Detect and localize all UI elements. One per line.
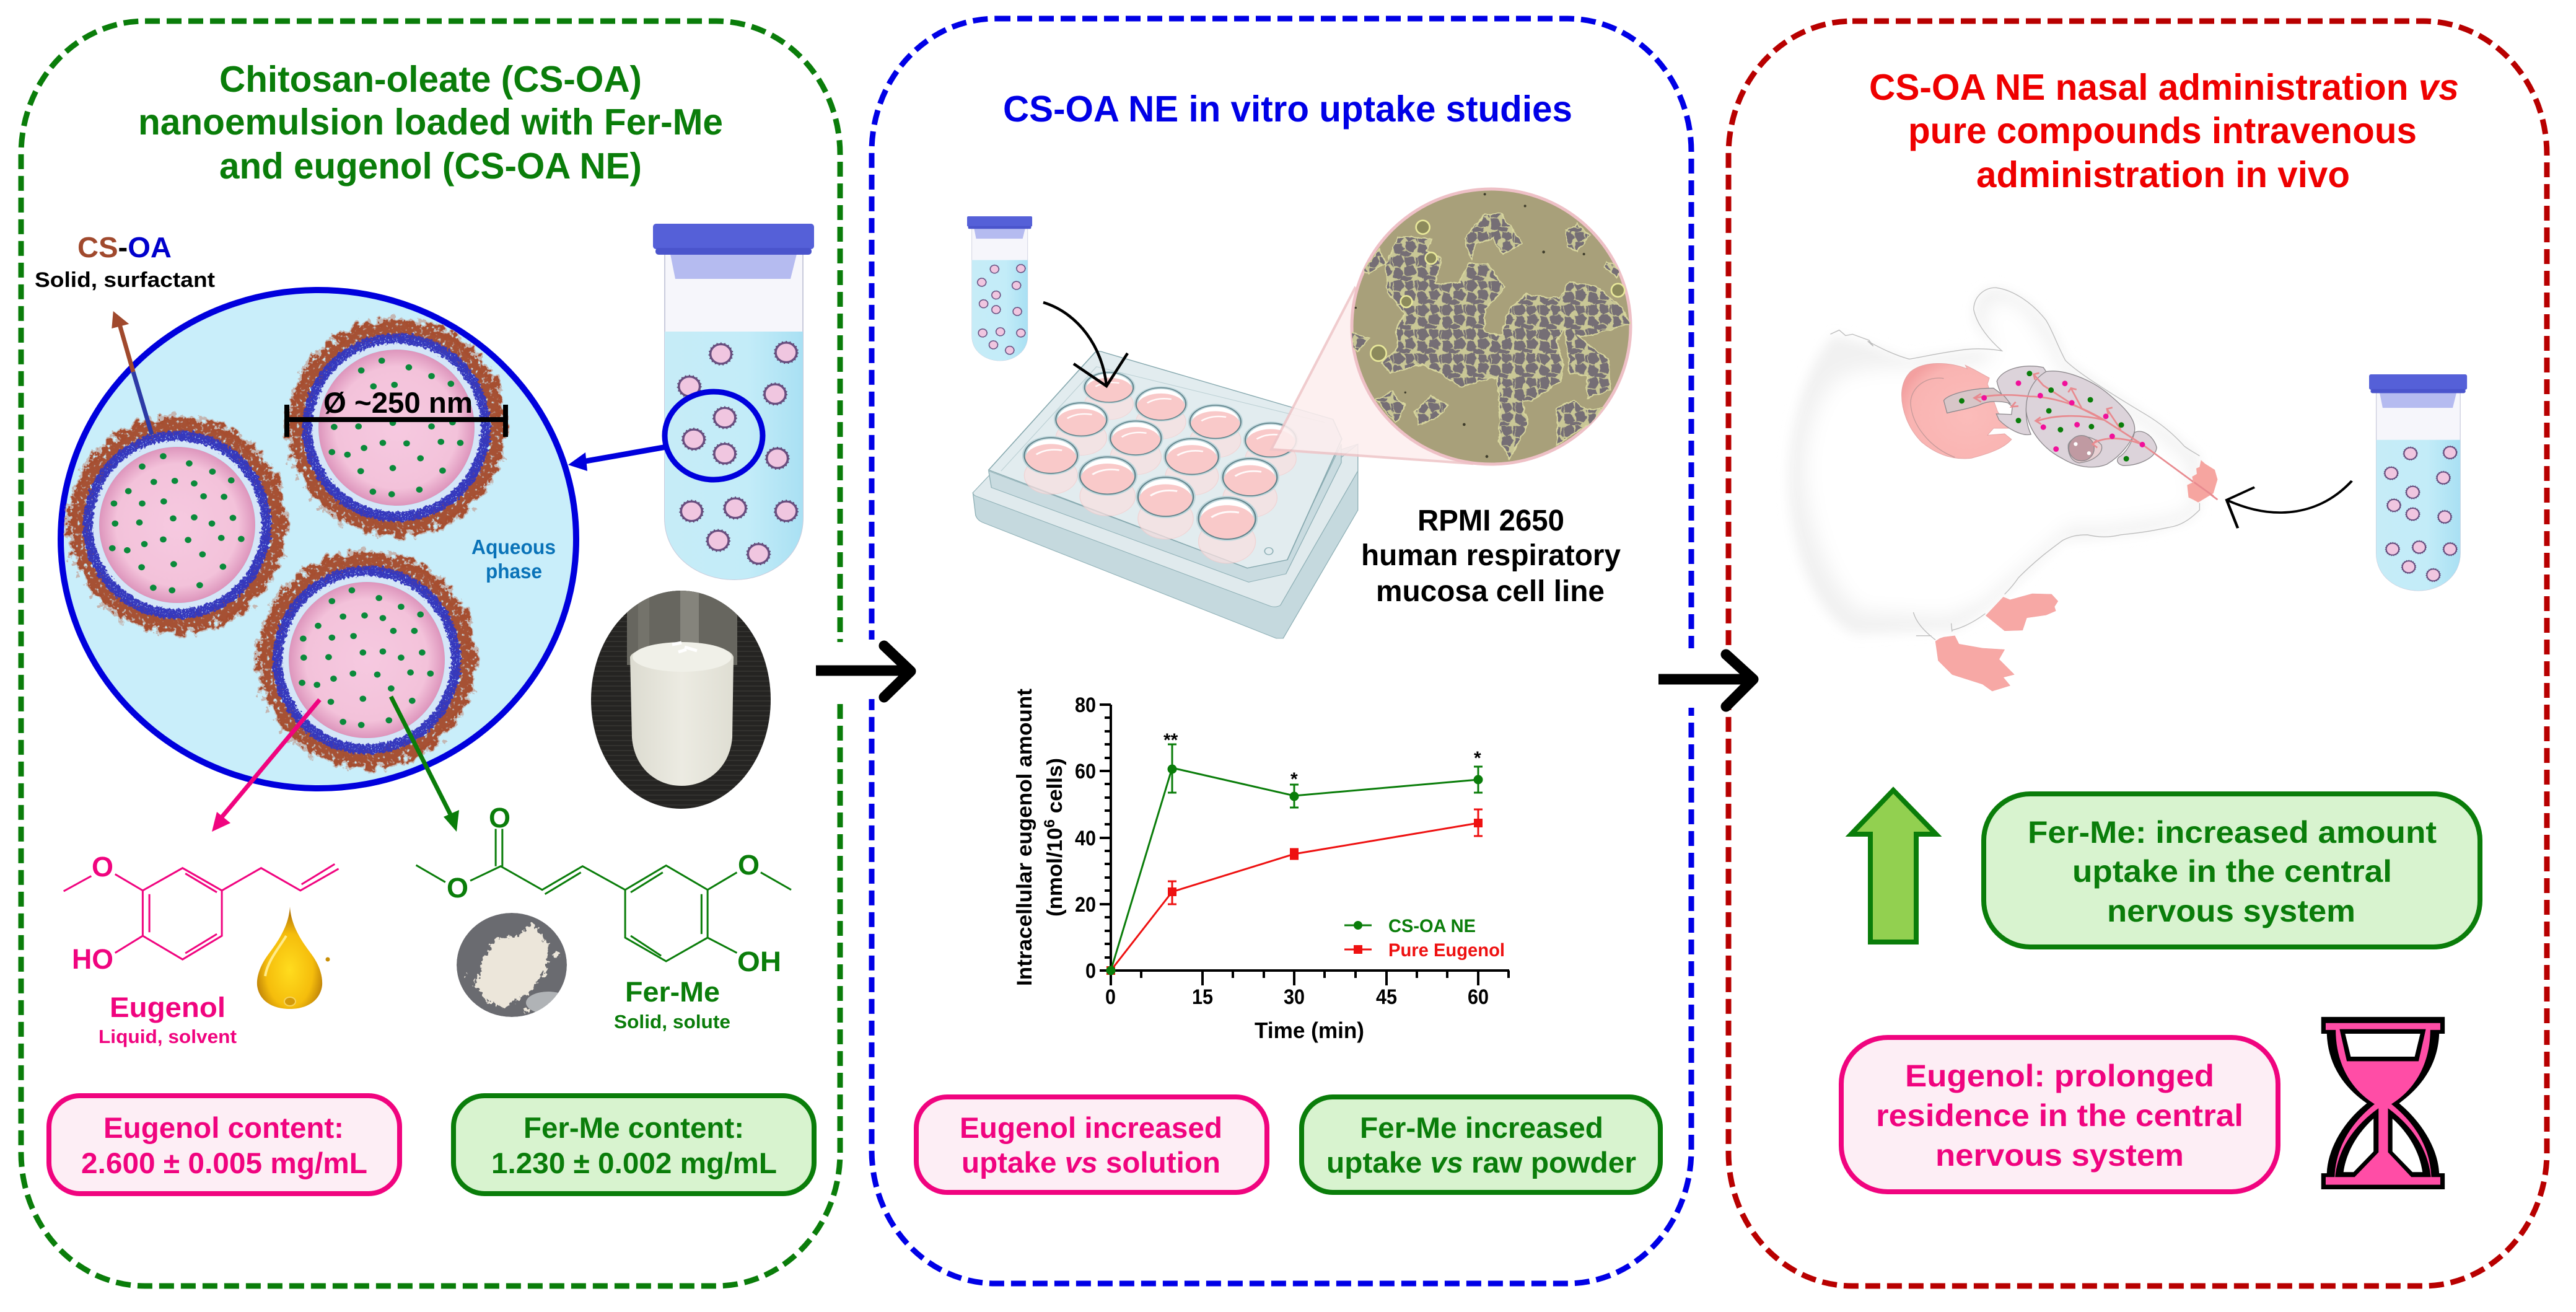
ear	[1902, 363, 2012, 459]
callout: fer-me in vivo: Fer-Me: increased amount	[2028, 815, 2437, 850]
y axis title: cells)	[1043, 758, 1067, 819]
panel 3 title: pure compounds intravenous	[1908, 110, 2417, 151]
panel 3 title: CS-OA NE nasal administration vs	[1869, 67, 2459, 108]
arrows to compounds	[212, 697, 459, 832]
legend	[1344, 916, 1505, 961]
hind paw	[1935, 636, 2014, 691]
fer-me label: Solid, solute	[614, 1011, 730, 1032]
callout: fer-me content	[453, 1096, 814, 1194]
significance stars: *	[1290, 769, 1298, 790]
eugenol structure: HO	[72, 943, 113, 975]
small vial	[967, 216, 1032, 361]
x axis tick labels: 60	[1468, 985, 1489, 1009]
ferulic methyl ester structure: OH	[737, 946, 781, 977]
cell line label: mucosa cell line	[1376, 575, 1605, 608]
callout: eugenol in vivo: residence in the central	[1876, 1098, 2243, 1133]
callout: fer-me content: 1.230 ± 0.002 mg/mL	[491, 1147, 777, 1179]
droplet upper right	[290, 321, 503, 534]
cell culture plate	[973, 351, 1358, 638]
ferulic methyl ester structure: O	[489, 802, 510, 834]
x axis tick labels: 45	[1376, 985, 1397, 1009]
droplet left	[71, 418, 284, 632]
micrograph of RPMI 2650 cells	[1351, 189, 1631, 464]
arrow from vial to nose	[2227, 481, 2352, 528]
x axis tick labels	[1105, 985, 1489, 1009]
zoom callout wedge	[1271, 288, 1471, 464]
mouse body	[1789, 288, 2199, 640]
legend: CS-OA NE	[1388, 916, 1476, 936]
droplet bottom	[260, 553, 473, 767]
panel 2 title: CS-OA NE in vitro uptake studies	[1003, 89, 1572, 130]
ferulic methyl ester structure: O	[738, 849, 760, 881]
callout: fer-me in vivo: nervous system	[2107, 894, 2355, 928]
y axis title: (nmol/10	[1043, 830, 1067, 917]
brain dots	[1959, 371, 2145, 462]
callout: fer-me in vivo: uptake in the central	[2072, 854, 2392, 889]
y axis title	[1013, 689, 1067, 986]
eugenol structure: O	[92, 851, 113, 883]
panel 1 title	[138, 59, 723, 187]
CS-OA label: CS-OA	[77, 231, 172, 263]
callout: eugenol in vivo: Eugenol: prolonged	[1905, 1059, 2214, 1093]
significance stars: **	[1163, 730, 1178, 751]
fer-me label: Fer-Me	[625, 976, 720, 1008]
y axis title: Intracellular eugenol amount	[1013, 689, 1036, 986]
legend: Pure Eugenol	[1388, 940, 1505, 961]
y axis tick labels: 80	[1075, 693, 1096, 717]
panel 1 title: nanoemulsion loaded with Fer-Me	[138, 102, 723, 143]
y axis tick labels: 40	[1075, 827, 1096, 850]
callout: fer-me increased uptake	[1302, 1097, 1660, 1192]
fer-me label	[614, 976, 730, 1032]
callout: fer-me content: Fer-Me content:	[524, 1111, 744, 1144]
panel: in vivo administration	[1728, 21, 2547, 1286]
icon: oil drop	[257, 907, 330, 1009]
photo of solid powder	[457, 913, 571, 1017]
series: CS-OA NE	[1106, 744, 1483, 975]
arrow: panel 1 to panel 2	[816, 640, 911, 702]
cell line label: human respiratory	[1361, 539, 1621, 572]
panel 3 title	[1869, 67, 2459, 195]
y axis tick labels	[1075, 693, 1096, 983]
icon: hourglass	[2321, 1017, 2445, 1189]
aqueous phase label: phase	[486, 560, 542, 583]
vial with nanoemulsion	[653, 224, 814, 579]
eugenol label: Liquid, solvent	[99, 1026, 237, 1047]
nose	[2187, 460, 2217, 503]
eugenol label	[99, 992, 237, 1047]
callout: eugenol in vivo	[1841, 1037, 2278, 1192]
callout: fer-me increased uptake: uptake vs raw powder	[1326, 1146, 1636, 1179]
cell line label: RPMI 2650	[1417, 504, 1564, 537]
arrow: panel 2 to panel 3	[1658, 648, 1753, 708]
eugenol label: Eugenol	[110, 992, 226, 1023]
aqueous phase label	[471, 535, 556, 583]
panel 3 title: administration in vivo	[1976, 154, 2350, 195]
aqueous phase label: Aqueous	[471, 535, 556, 558]
CS-OA label: Solid, surfactant	[35, 268, 215, 292]
callout: fer-me in vivo	[1984, 794, 2480, 947]
panel 1 title: Chitosan-oleate (CS-OA)	[219, 59, 642, 100]
diameter bar	[287, 386, 506, 437]
nerve pathway arrows	[1974, 373, 2217, 500]
x axis title: Time (min)	[1255, 1018, 1364, 1043]
chart axes	[1100, 705, 1509, 985]
ferulic methyl ester structure: O	[447, 872, 468, 904]
panel 1 title: and eugenol (CS-OA NE)	[219, 146, 642, 187]
ferulic methyl ester structure	[416, 802, 791, 977]
vial panel 3	[2369, 374, 2467, 591]
front paw	[1986, 594, 2058, 631]
eugenol structure	[64, 851, 339, 975]
y axis tick labels: 60	[1075, 760, 1096, 783]
significance stars	[1163, 730, 1481, 790]
x axis tick labels: 30	[1284, 985, 1305, 1009]
callout: eugenol content	[49, 1096, 400, 1194]
panel: in vitro uptake	[872, 19, 1691, 1283]
icon: green up arrow	[1851, 790, 1936, 942]
callout: eugenol increased uptake	[916, 1097, 1267, 1192]
callout: eugenol increased uptake: uptake vs solution	[962, 1146, 1220, 1179]
mouse illustration	[1789, 288, 2217, 691]
panel: chitosan-oleate nanoemulsion	[21, 21, 840, 1286]
y axis tick labels: 0	[1085, 959, 1096, 983]
brain	[1943, 366, 2157, 467]
arrow: surface to CS-OA label	[113, 313, 152, 434]
x axis tick labels: 0	[1105, 985, 1116, 1009]
series: pure eugenol	[1106, 809, 1483, 975]
magnified aqueous phase circle	[61, 290, 576, 788]
callout: fer-me increased uptake: Fer-Me increased	[1360, 1111, 1603, 1144]
y axis tick labels: 20	[1075, 893, 1096, 917]
diameter bar: Ø ~250 nm	[323, 386, 473, 419]
cell line label	[1361, 504, 1621, 608]
CS-OA label	[35, 231, 215, 292]
uptake line chart	[1013, 689, 1509, 1043]
callout: eugenol content: Eugenol content:	[103, 1111, 344, 1144]
x axis tick labels: 15	[1192, 985, 1213, 1009]
significance stars: *	[1474, 748, 1481, 768]
zoom ellipse and arrow	[568, 392, 763, 480]
callout: eugenol content: 2.600 ± 0.005 mg/mL	[81, 1147, 367, 1179]
y axis title: 6	[1041, 819, 1058, 828]
callout: eugenol increased uptake: Eugenol increased	[960, 1111, 1222, 1144]
callout: eugenol in vivo: nervous system	[1935, 1138, 2184, 1173]
arrow from vial to well	[1043, 302, 1128, 386]
photo of milky nanoemulsion tube	[591, 591, 771, 809]
